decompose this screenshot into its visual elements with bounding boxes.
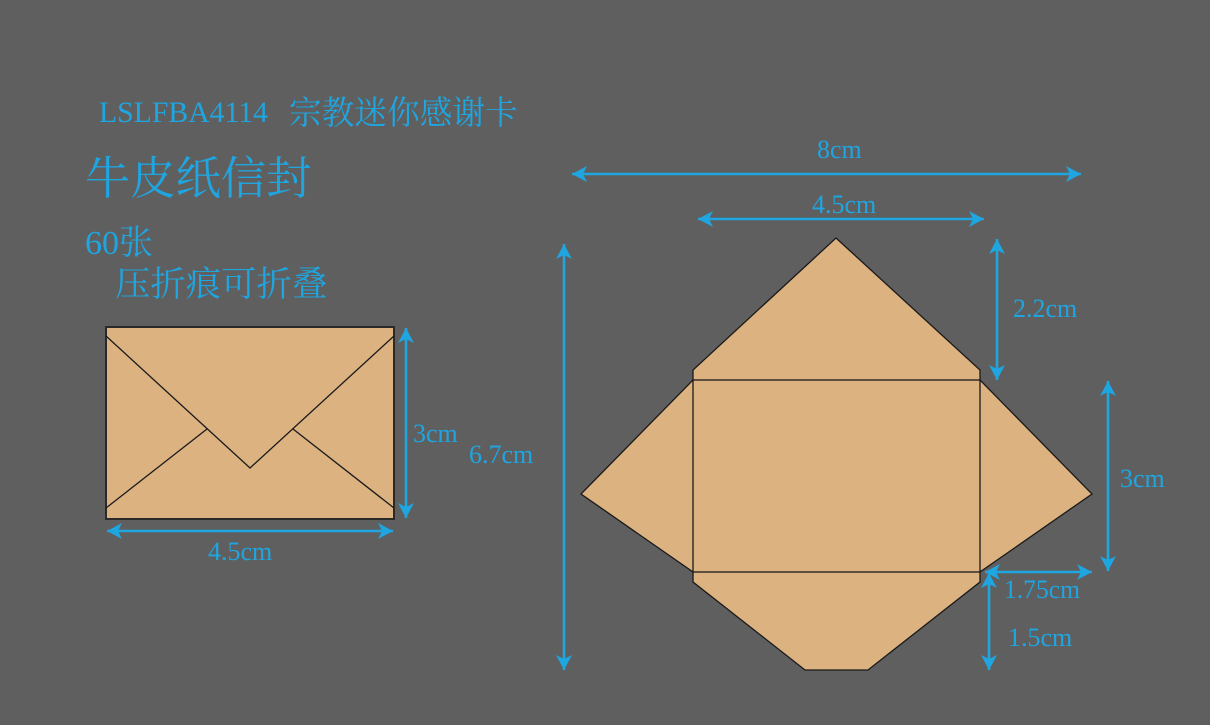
dimension: envelope height 3cm: 3cm [413, 419, 458, 448]
dimension: envelope width 4.5cm: 4.5cm [208, 537, 272, 566]
title: kraft paper envelope: 牛皮纸信封 [85, 154, 312, 204]
dimension: total height 6.7cm: 6.7cm [469, 440, 533, 469]
dimension: bottom flap 1.5cm [989, 573, 1072, 670]
dimension: body height 3cm: 3cm [1120, 464, 1165, 493]
heading: product code and name: LSLFBA4114 [99, 96, 268, 129]
dimension: top flap 2.2cm: 2.2cm [1013, 294, 1077, 323]
diagram: unfolded envelope template [581, 238, 1092, 670]
heading: product code and name: 宗教迷你感谢卡 [289, 95, 518, 132]
dimension: total width 8cm: 8cm [817, 135, 862, 164]
dimension: body width 4.5cm: 4.5cm [812, 190, 876, 219]
dimension: side flap 1.75cm: 1.75cm [1004, 575, 1080, 604]
text: pre-creased foldable: 压折痕可折叠 [115, 264, 327, 304]
heading: product code and name [99, 95, 518, 132]
text: quantity 60: 60张 [85, 225, 153, 262]
dimension: bottom flap 1.5cm: 1.5cm [1008, 623, 1072, 652]
dimension: side flap 1.75cm [985, 572, 1092, 604]
diagram: assembled envelope [106, 327, 394, 519]
